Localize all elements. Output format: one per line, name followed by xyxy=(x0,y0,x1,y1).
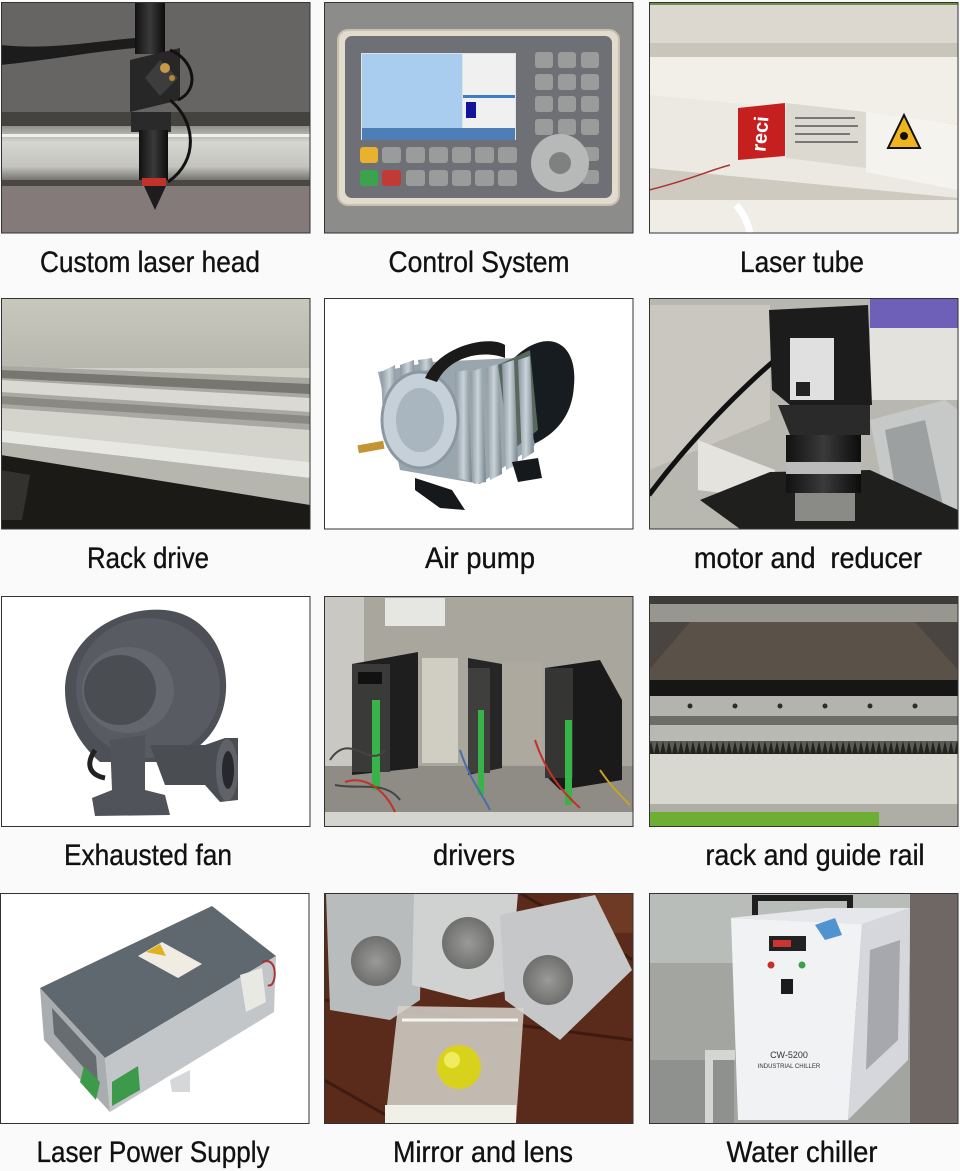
heading: exhausted fan: Exhausted fan xyxy=(64,839,232,872)
rack teeth xyxy=(649,741,958,754)
panel: drivers xyxy=(324,596,633,827)
panel: laser tube: reci xyxy=(748,115,774,153)
screen xyxy=(361,53,516,140)
icon: servo drivers xyxy=(352,652,622,805)
heading: laser tube: Laser tube xyxy=(740,246,864,279)
icon: air pump xyxy=(358,341,574,510)
icon: reci tube label xyxy=(738,103,785,160)
icon: lens in clear case xyxy=(385,1006,524,1123)
heading: control system: Control System xyxy=(388,246,570,279)
heading: mirror and lens: Mirror and lens xyxy=(393,1136,573,1169)
panel: air pump xyxy=(324,298,633,529)
icon: rail xyxy=(870,400,958,525)
keypad xyxy=(382,52,599,186)
panel: water chiller xyxy=(649,893,958,1124)
panel: custom laser head xyxy=(1,2,310,233)
panel: laser tube xyxy=(649,2,958,233)
panel: mirror and lens xyxy=(324,893,633,1124)
panel: exhausted fan xyxy=(2,596,310,826)
icon: stepper motor xyxy=(769,305,872,521)
icon: chiller unit xyxy=(730,898,910,1120)
icon: chiller unit: INDUSTRIAL CHILLER xyxy=(758,1064,821,1070)
icon: power supply box xyxy=(40,906,276,1112)
icon: foil packets with mirrors xyxy=(326,893,632,1040)
panel: rack drive xyxy=(1,298,310,529)
panel: control system xyxy=(324,2,633,233)
panel: laser power supply xyxy=(0,894,309,1124)
heading: rack and guide rail: rack and guide rail xyxy=(706,839,924,872)
heading: custom laser head: Custom laser head xyxy=(40,246,260,279)
heading: laser power supply: Laser Power Supply xyxy=(36,1136,270,1169)
heading: drivers: drivers xyxy=(433,839,515,872)
heading: air pump: Air pump xyxy=(425,542,535,575)
heading: motor and reducer: motor and reducer xyxy=(694,542,922,575)
icon: laser warning label xyxy=(866,112,958,190)
panel: motor and reducer xyxy=(649,298,958,529)
heading: water chiller: Water chiller xyxy=(726,1136,878,1169)
panel: rack and guide rail xyxy=(649,596,958,827)
icon: blower fan xyxy=(65,610,238,816)
icon: laser head assembly xyxy=(130,2,192,210)
icon: chiller unit: CW-5200 xyxy=(770,1050,808,1060)
heading: rack drive: Rack drive xyxy=(87,542,209,575)
